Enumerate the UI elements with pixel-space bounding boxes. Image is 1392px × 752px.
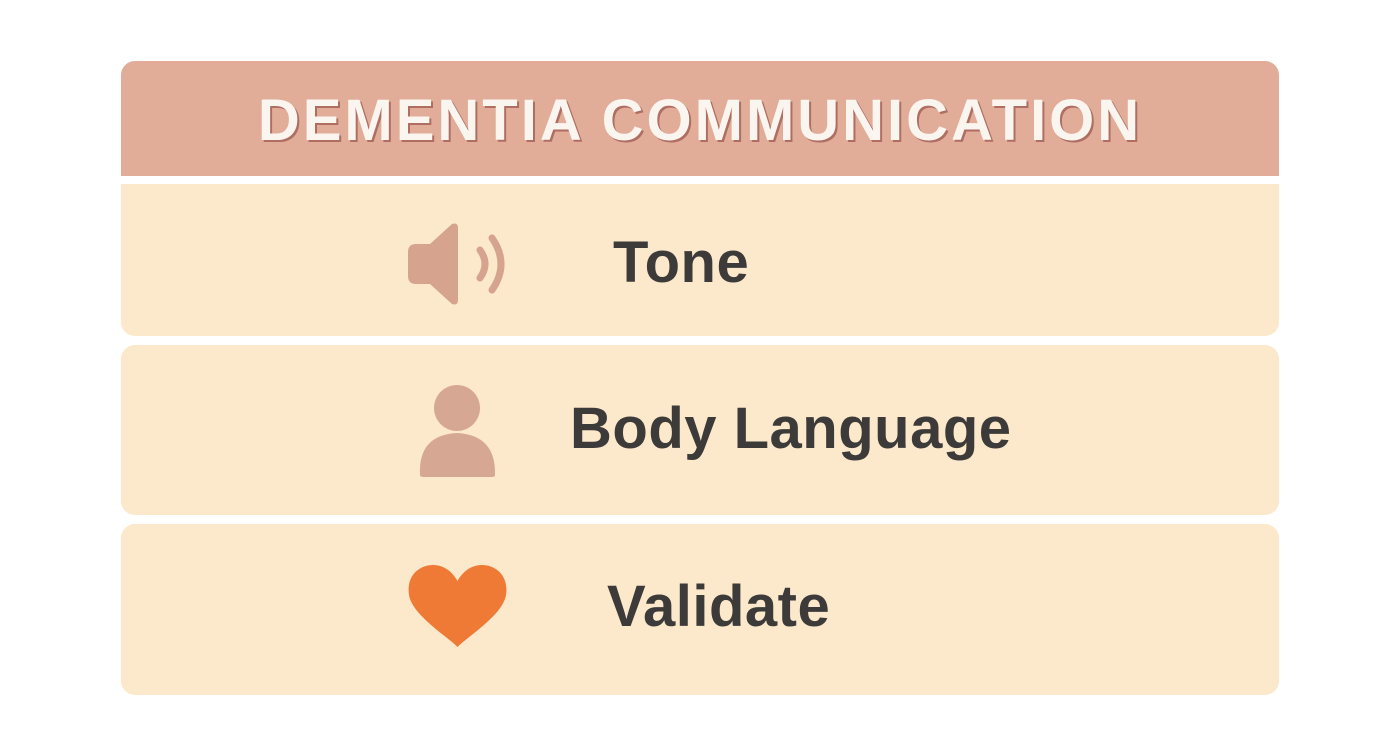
label: Validate: Validate (607, 574, 830, 639)
icon: speaker (408, 224, 504, 304)
panel: tone (121, 184, 1279, 336)
header banner (121, 61, 1279, 176)
label: Body Language: Body Language (570, 396, 1012, 461)
icon: heart (408, 565, 506, 647)
panel: validate (121, 524, 1279, 695)
panel: body language (121, 345, 1279, 515)
icon: person (420, 385, 495, 477)
label: Tone: Tone (613, 230, 749, 295)
title: DEMENTIA COMMUNICATION (258, 88, 1142, 153)
